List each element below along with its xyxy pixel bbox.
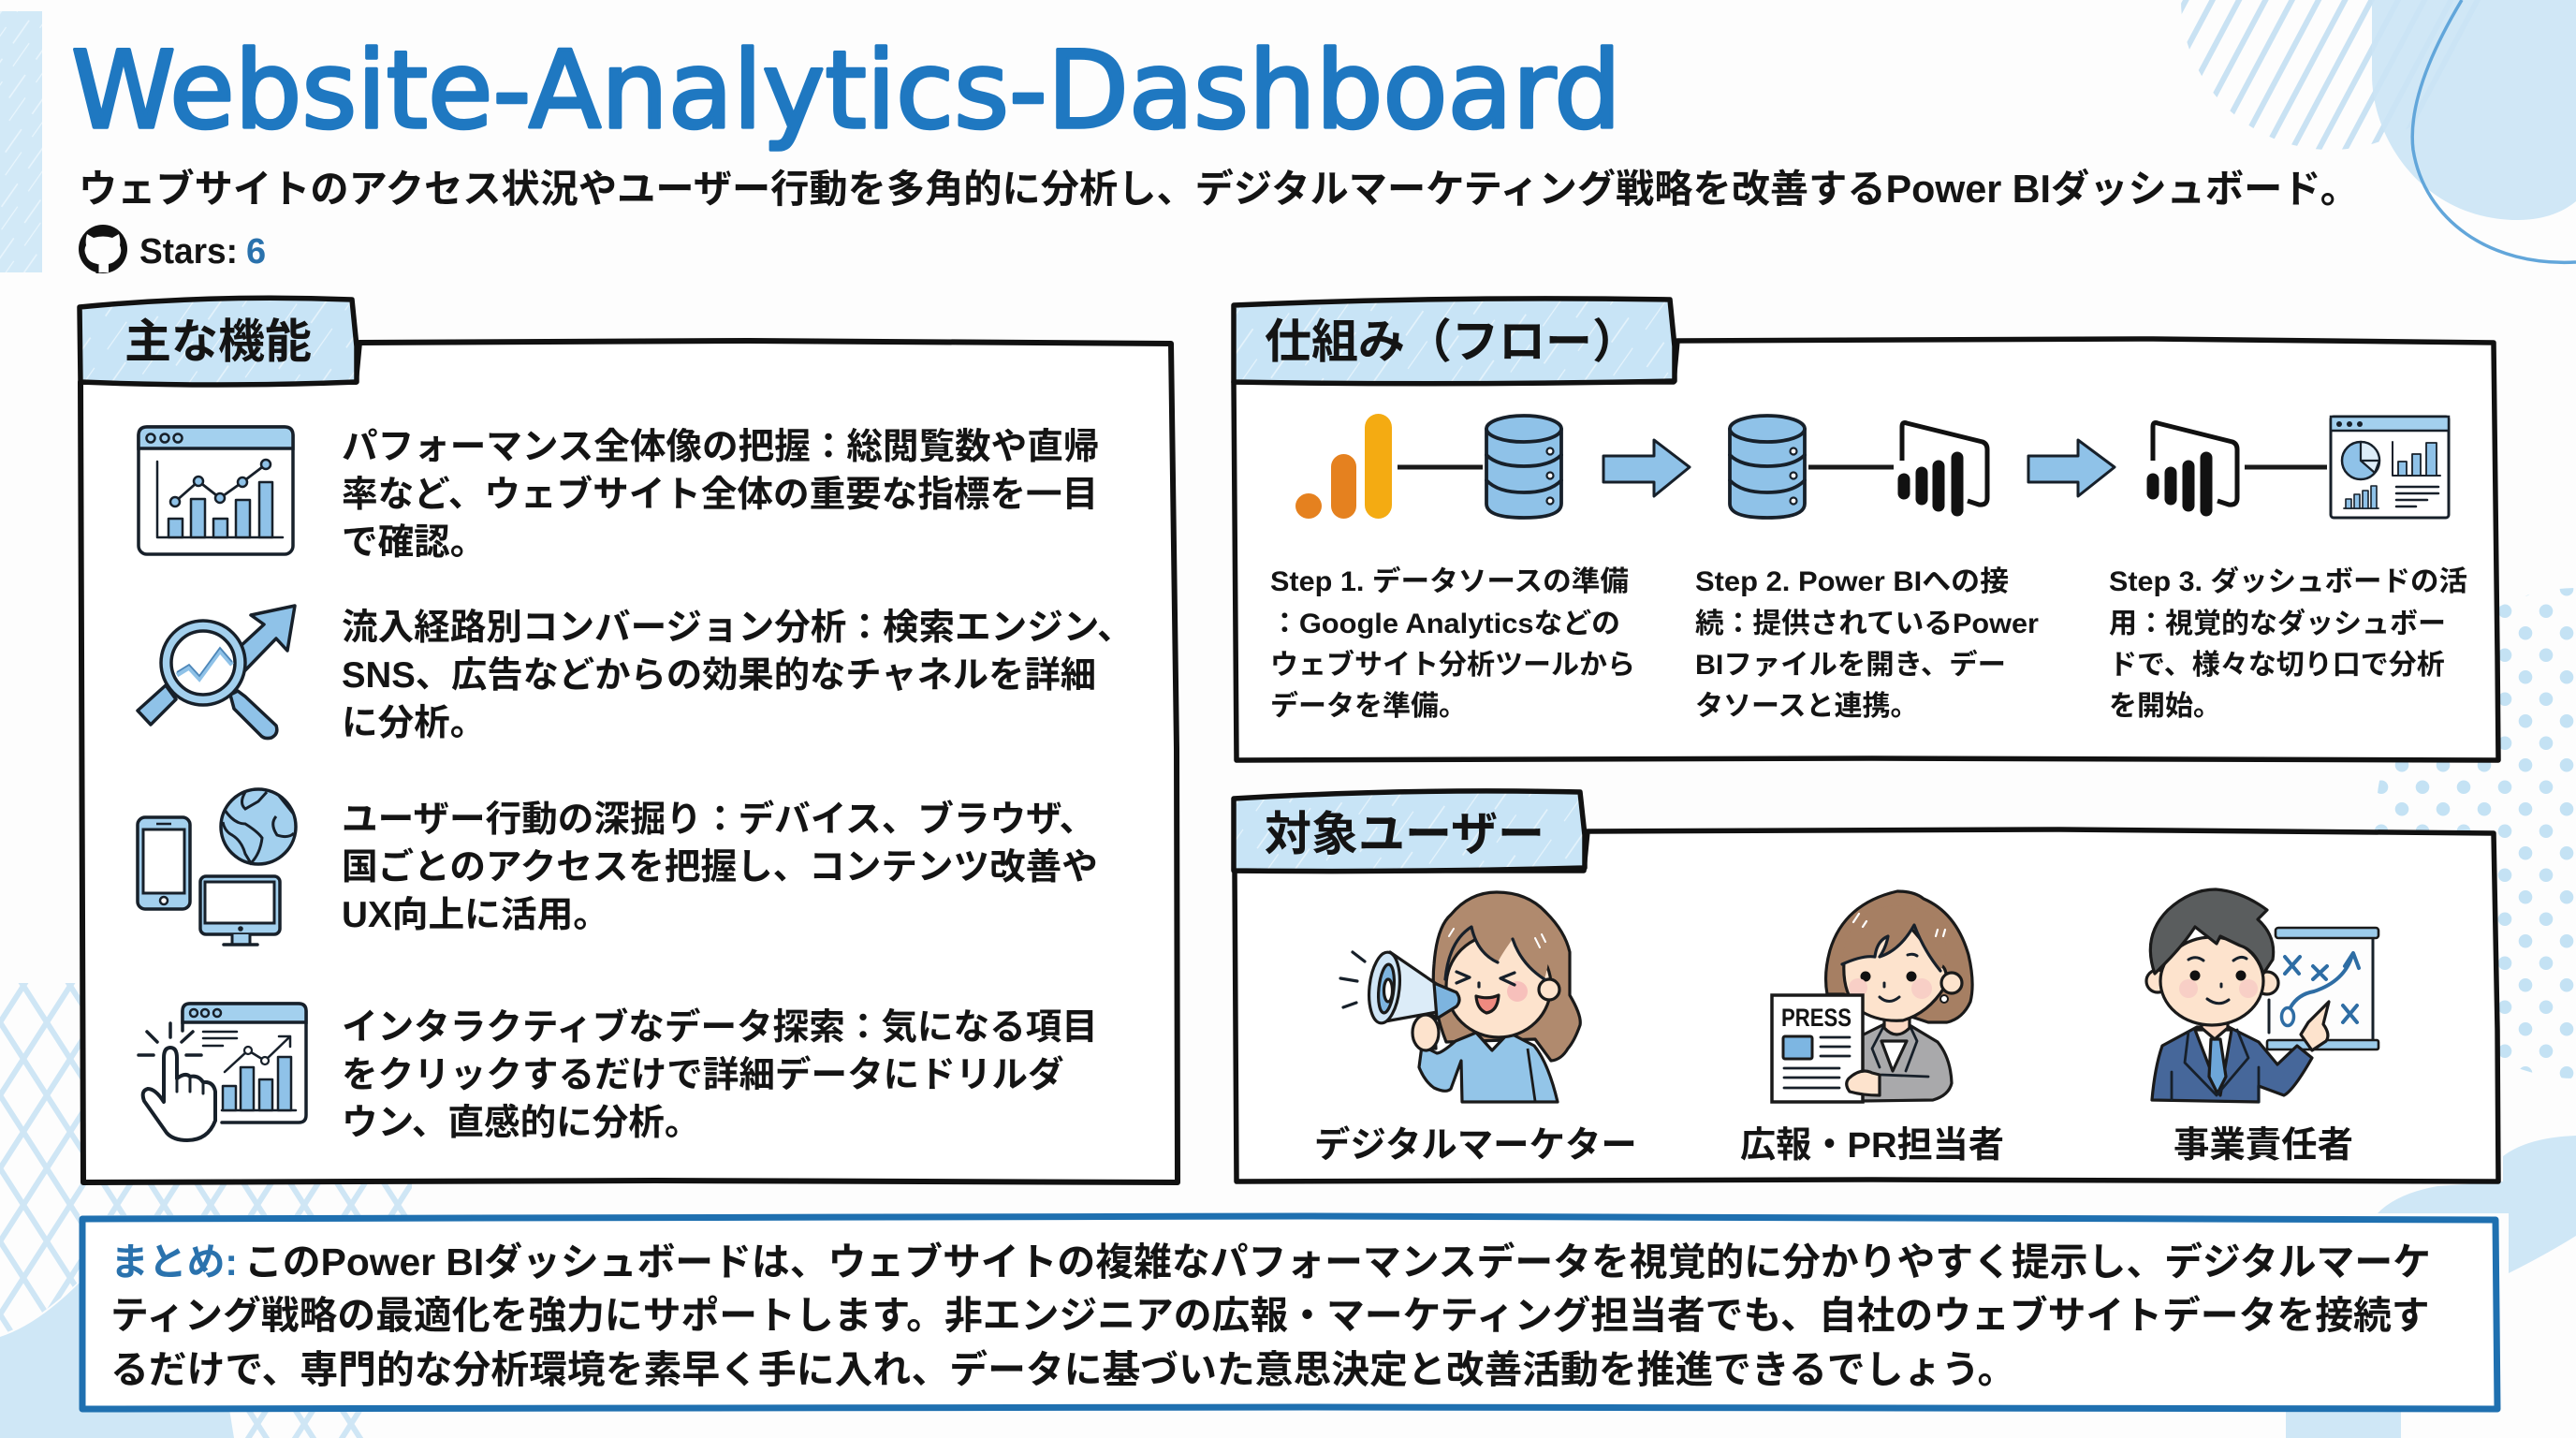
icon: power bi xyxy=(1902,423,1987,510)
feature text: で確認。 xyxy=(342,522,486,563)
heading tab: 対象ユーザー xyxy=(1265,808,1544,860)
panel: flow xyxy=(1234,299,2498,760)
feature text: SNS、広告などからの効果的なチャネルを詳細 xyxy=(342,655,1096,696)
feature 4 xyxy=(139,1004,1102,1143)
feature text: 国ごとのアクセスを把握し、コンテンツ改善や xyxy=(342,847,1098,888)
heading tab: 主な機能 xyxy=(124,315,312,368)
icon: power bi xyxy=(2153,423,2237,510)
persona: business owner xyxy=(2146,889,2378,1166)
step 3 text: を開始。 xyxy=(2109,691,2221,722)
arrow xyxy=(2028,440,2115,496)
step 1 text: データを準備。 xyxy=(1270,690,1467,722)
feature 1 xyxy=(139,427,1104,563)
feature 2 xyxy=(138,606,1137,743)
illustration: woman with press sheet xyxy=(1772,891,1972,1102)
icon: click and chart xyxy=(139,1004,306,1140)
panel frame xyxy=(82,1216,2497,1409)
feature text: インタラクティブなデータ探索：気になる項目 xyxy=(342,1006,1098,1048)
heading tab xyxy=(1234,791,1585,872)
summary label: まとめ: xyxy=(110,1240,238,1284)
feature text: UX向上に活用。 xyxy=(342,895,609,935)
connector xyxy=(1808,464,1894,470)
feature text: 率など、ウェブサイト全体の重要な指標を一目 xyxy=(342,474,1098,515)
subtitle: ウェブサイトのアクセス状況やユーザー行動を多角的に分析し、デジタルマーケティング戦略を改善するPower BIダッシュボード。 xyxy=(79,167,2359,211)
panel frame xyxy=(80,341,1178,1182)
step 1 text: ：Google Analyticsなどの xyxy=(1270,609,1620,639)
illustration: woman with press sheet: PRESS xyxy=(1781,1004,1852,1032)
step 3 text: Step 3. ダッシュボードの活 xyxy=(2109,565,2467,597)
step 3 text: ドで、様々な切り口で分析 xyxy=(2109,650,2445,681)
persona label: 事業責任者 xyxy=(2174,1125,2353,1166)
github stars xyxy=(79,225,266,273)
heading tab xyxy=(1234,299,1675,384)
icon: dashboard xyxy=(2331,417,2449,518)
connector xyxy=(2245,464,2327,470)
illustration: woman with megaphone xyxy=(1340,892,1580,1102)
connector xyxy=(1398,464,1483,470)
icon: google analytics xyxy=(1295,414,1392,519)
persona: digital marketer xyxy=(1314,892,1637,1166)
feature text: ユーザー行動の深掘り：デバイス、ブラウザ、 xyxy=(342,799,1095,840)
step 2 text: 続：提供されているPower xyxy=(1695,609,2039,639)
panel frame xyxy=(1234,339,2498,760)
step 2 text: Step 2. Power BIへの接 xyxy=(1695,566,2009,597)
persona label: デジタルマーケター xyxy=(1314,1124,1637,1166)
title: Website-Analytics-Dashboard xyxy=(71,28,1621,153)
icon: magnifier and arrow xyxy=(138,606,295,739)
summary text: このPower BIダッシュボードは、ウェブサイトの複雑なパフォーマンスデータを視覚的に分かりやすく提示し、デジタルマーケ xyxy=(244,1240,2431,1284)
step 2 text: タソースと連携。 xyxy=(1695,691,1919,722)
step 3 text: 用：視覚的なダッシュボー xyxy=(2109,608,2446,639)
persona: pr manager xyxy=(1740,891,2004,1166)
heading tab: 仕組み（フロー） xyxy=(1265,315,1639,368)
stars label: Stars: xyxy=(139,232,238,271)
icon: devices and globe xyxy=(138,789,296,945)
step 1 text: ウェブサイト分析ツールから xyxy=(1270,649,1635,681)
arrow xyxy=(1603,440,1690,496)
persona label: 広報・PR担当者 xyxy=(1740,1125,2004,1166)
icon: browser chart xyxy=(139,427,293,554)
icon: database xyxy=(1730,416,1805,518)
feature text: をクリックするだけで詳細データにドリルダ xyxy=(342,1054,1064,1095)
panel: target users xyxy=(1234,791,2498,1181)
step 1 text: Step 1. データソースの準備 xyxy=(1270,565,1629,597)
illustration: man with board xyxy=(2146,889,2378,1102)
icon: database xyxy=(1486,416,1561,518)
feature text: パフォーマンス全体像の把握：総閲覧数や直帰 xyxy=(342,427,1099,467)
summary text: ティング戦略の最適化を強力にサポートします。非エンジニアの広報・マーケティング担当者でも、自社のウェブサイトデータを接続す xyxy=(110,1294,2430,1337)
panel: features xyxy=(80,298,1178,1182)
feature text: 流入経路別コンバージョン分析：検索エンジン、 xyxy=(342,608,1134,648)
feature text: ウン、直感的に分析。 xyxy=(342,1103,700,1143)
step 2 text: BIファイルを開き、デー xyxy=(1695,649,2006,681)
feature text: に分析。 xyxy=(342,703,486,743)
feature 3 xyxy=(138,789,1102,945)
panel frame xyxy=(1235,829,2498,1181)
panel: summary xyxy=(82,1216,2497,1409)
heading tab xyxy=(80,298,357,385)
icon: github xyxy=(79,225,127,273)
summary text: るだけで、専門的な分析環境を素早く手に入れ、データに基づいた意思決定と改善活動を推進できるでしょう。 xyxy=(110,1348,2015,1391)
stars value: 6 xyxy=(246,232,266,271)
